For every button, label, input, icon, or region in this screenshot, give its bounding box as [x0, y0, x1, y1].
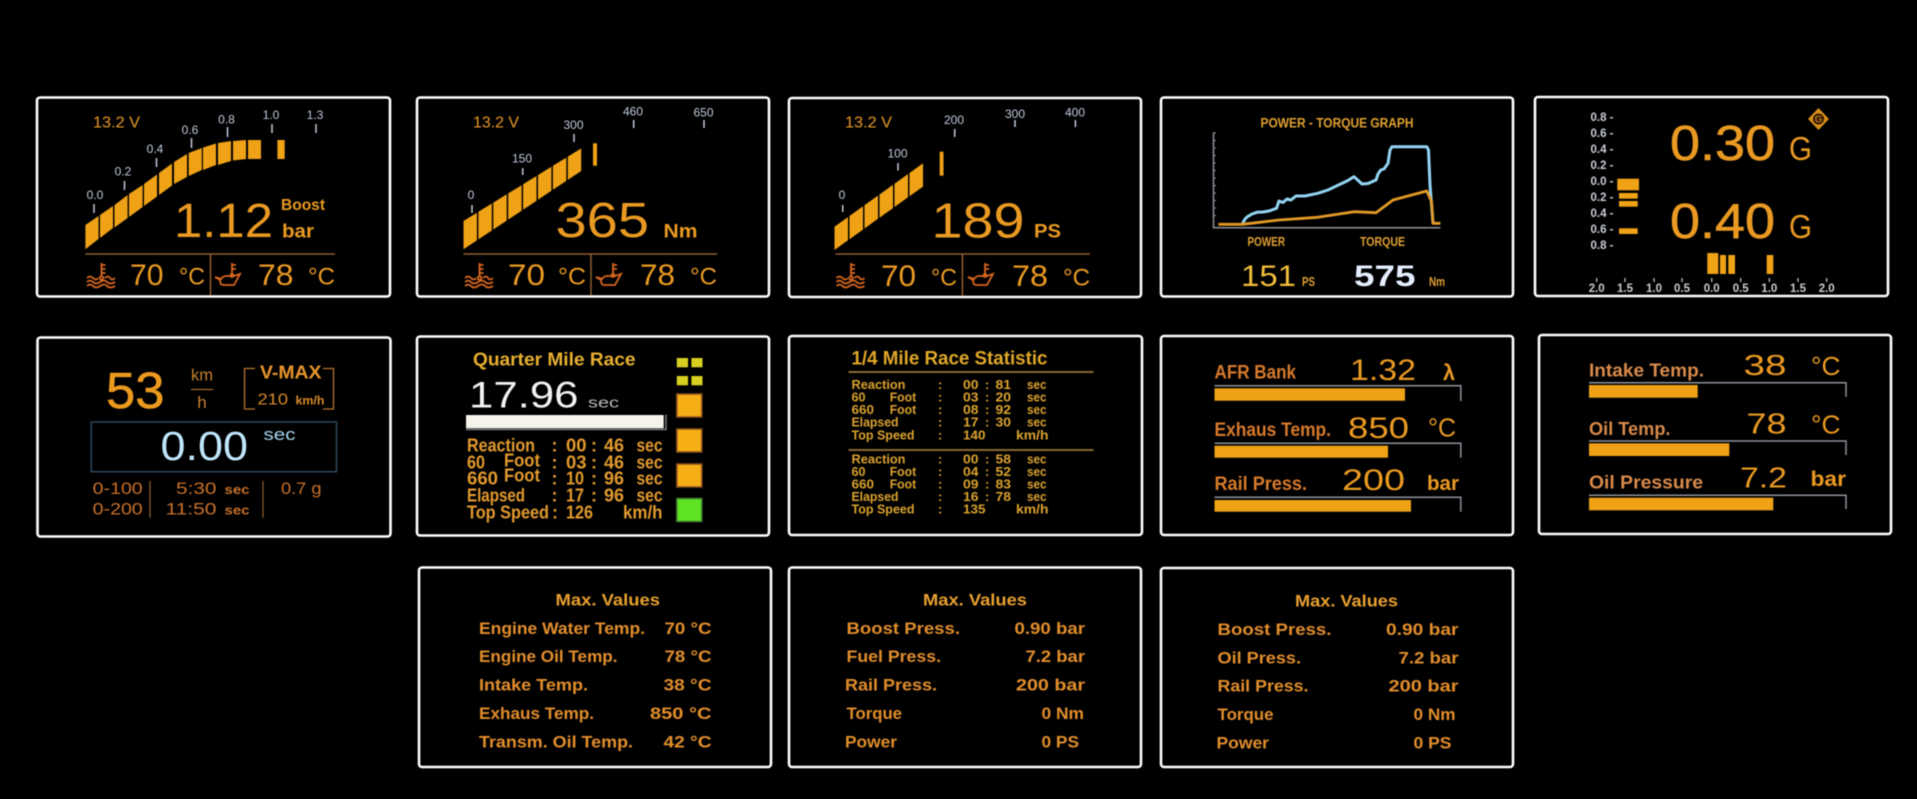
- panel: intake oil: [1539, 335, 1891, 534]
- boost value: 1.12: [174, 195, 273, 248]
- water temperature value: 70: [130, 259, 164, 292]
- longitudinal g value: [1670, 117, 1812, 171]
- values table: Intake Temp.: [479, 676, 588, 694]
- lateral g value: [1670, 195, 1812, 249]
- race results table: sec: [636, 468, 662, 488]
- statistic table 2: 16: [963, 489, 978, 504]
- vertical scale: 0.6 -: [1590, 128, 1614, 140]
- power scale labels: 0: [839, 188, 846, 202]
- torque scale labels: [468, 104, 714, 213]
- values table: 200 bar: [1016, 676, 1085, 694]
- statistic table 1: 20: [996, 390, 1011, 404]
- race results table: sec: [636, 436, 662, 456]
- statistic table 2: 52: [996, 464, 1011, 479]
- race results table: :: [552, 486, 558, 506]
- exhaust row: Exhaus Temp.: [1214, 420, 1331, 441]
- values table: Power: [845, 732, 897, 752]
- values table: [1216, 620, 1459, 752]
- oil temperature row: [1589, 408, 1846, 456]
- v-max box: km/h: [296, 394, 324, 408]
- panel: boost gauge: °C: [308, 264, 335, 290]
- statistic table 1: 140: [963, 428, 986, 442]
- values table: 850 °C: [650, 704, 712, 723]
- longitudinal g value: 0.30: [1670, 117, 1775, 171]
- race results table: sec: [636, 486, 662, 506]
- statistic table 2: :: [985, 476, 989, 492]
- statistic table 2: sec: [1027, 476, 1046, 492]
- boost scale labels: 0.0: [87, 188, 104, 202]
- icon: g badge: [1808, 108, 1829, 130]
- oil pressure row: Oil Pressure: [1589, 472, 1703, 492]
- statistic table 1: km/h: [1016, 428, 1049, 442]
- panel: race statistic: [789, 336, 1142, 535]
- acceleration times: sec: [224, 482, 250, 497]
- statistic table 2: 660: [852, 476, 874, 492]
- torque value: 365: [556, 194, 649, 248]
- speed unit: [191, 366, 213, 412]
- values table: Rail Press.: [1218, 676, 1308, 696]
- statistic table 1: :: [938, 414, 942, 430]
- horizontal scale: 1.0: [1761, 283, 1777, 295]
- race results table: :: [591, 486, 597, 506]
- values table: Engine Water Temp.: [479, 619, 645, 638]
- line chart: [1214, 132, 1440, 228]
- statistic table 2: :: [938, 489, 942, 504]
- icon: g badge: G: [1815, 114, 1823, 126]
- statistic table 1: :: [938, 402, 942, 417]
- exhaust row: [1214, 412, 1461, 458]
- statistic table 1: Elapsed: [852, 414, 899, 430]
- race results table: :: [591, 436, 597, 456]
- acceleration times: [93, 480, 322, 518]
- race results table: Top Speed: [467, 502, 549, 522]
- panel: boost gauge: [37, 98, 390, 296]
- statistic table 1: :: [938, 377, 942, 392]
- race time: [469, 374, 620, 416]
- v-max box: [244, 362, 334, 409]
- panel: power gauge: °C: [1063, 264, 1090, 292]
- icon: water temperature: [836, 263, 864, 288]
- power bar segments: [834, 152, 944, 250]
- vertical scale: 0.2 -: [1590, 192, 1614, 204]
- statistic table 1: 92: [996, 402, 1011, 417]
- vertical scale: 0.4 -: [1590, 144, 1614, 156]
- statistic table 2: :: [938, 464, 942, 479]
- statistic table 2: :: [985, 464, 989, 479]
- statistic title: 1/4 Mile Race Statistic: [852, 348, 1048, 370]
- race results table: 96: [604, 486, 624, 506]
- exhaust row: 850: [1348, 412, 1409, 445]
- values table: 0 PS: [1414, 734, 1452, 752]
- boost bar segments: [85, 140, 285, 249]
- statistic table 2: :: [938, 476, 942, 492]
- values table: 7.2 bar: [1398, 648, 1459, 668]
- horizontal scale: [1589, 278, 1835, 295]
- race results table: :: [591, 452, 597, 472]
- longitudinal g value: G: [1789, 130, 1812, 167]
- statistic table 1: 08: [963, 402, 978, 417]
- horizontal scale: 0.5: [1674, 283, 1691, 295]
- oil pressure row: bar: [1810, 468, 1846, 491]
- horizontal scale: 1.0: [1646, 283, 1662, 295]
- values table: 7.2 bar: [1026, 647, 1085, 666]
- horizontal scale: 0.5: [1733, 283, 1749, 295]
- statistic table 1: 60: [852, 390, 866, 404]
- vertical scale: 0.8 -: [1590, 112, 1614, 124]
- torque scale labels: 460: [623, 104, 643, 118]
- panel: afr exhaust rail: [1161, 336, 1513, 535]
- lateral g value: G: [1789, 208, 1812, 245]
- oil temperature row: 78: [1746, 408, 1786, 440]
- boost scale labels: 0.2: [115, 164, 132, 178]
- elapsed timer box: [91, 422, 336, 472]
- boost scale labels: [87, 108, 324, 213]
- statistic table 2: 04: [963, 464, 979, 479]
- boost scale labels: 1.3: [307, 108, 324, 122]
- rail pressure row: 200: [1342, 464, 1405, 497]
- statistic table 2: :: [985, 452, 989, 466]
- values table: Engine Oil Temp.: [479, 647, 618, 666]
- values table: 42 °C: [664, 732, 712, 752]
- statistic table 2: km/h: [1016, 502, 1049, 516]
- acceleration times: sec: [224, 502, 250, 518]
- torque scale labels: 150: [512, 152, 532, 166]
- power scale labels: 400: [1065, 106, 1085, 120]
- statistic table 2: [852, 452, 1049, 516]
- values table: Torque: [1218, 705, 1274, 724]
- panel: max values pressures fuel: [789, 568, 1141, 767]
- statistic table 2: 78: [996, 489, 1011, 504]
- graph title: POWER - TORQUE GRAPH: [1260, 116, 1414, 130]
- vertical scale: 0.2 -: [1590, 160, 1614, 172]
- intake row: °C: [1811, 351, 1840, 381]
- torque scale labels: 650: [693, 106, 714, 120]
- statistic table 2: :: [938, 452, 942, 466]
- statistic table 2: 60: [852, 464, 866, 479]
- boost scale labels: 0.6: [182, 123, 199, 137]
- values table: 0.90 bar: [1386, 620, 1459, 639]
- legend labels: POWER: [1248, 234, 1285, 249]
- panel: v-max timer: [38, 338, 390, 536]
- statistic table 1: :: [985, 390, 989, 404]
- heading: Max. Values: [556, 590, 660, 610]
- rail pressure row: bar: [1427, 473, 1459, 495]
- panel: max values pressures oil: [1161, 568, 1513, 767]
- statistic table 2: sec: [1027, 464, 1046, 479]
- divider: [464, 254, 717, 295]
- boost scale labels: 0.4: [147, 142, 164, 156]
- acceleration times: 11:50: [166, 500, 216, 518]
- power reading: [1241, 260, 1315, 293]
- torque unit: Nm: [664, 222, 698, 242]
- values table: Rail Press.: [845, 676, 937, 694]
- power value: 189: [932, 194, 1024, 248]
- heading: Max. Values: [1295, 592, 1398, 610]
- elapsed timer box: 0.00: [160, 423, 248, 469]
- race time: 17.96: [469, 374, 578, 416]
- power scale labels: [839, 106, 1085, 212]
- vertical scale: 0.6 -: [1590, 224, 1614, 236]
- v-max box: V-MAX: [260, 362, 322, 382]
- oil temperature value: 78: [640, 259, 675, 292]
- values table: 0.90 bar: [1014, 619, 1085, 638]
- values table: Exhaus Temp.: [479, 704, 594, 723]
- race results table: :: [552, 452, 558, 472]
- acceleration times: 5:30: [176, 480, 216, 498]
- race time: sec: [588, 394, 620, 412]
- race title: Quarter Mile Race: [473, 350, 636, 370]
- progress bar: [466, 414, 666, 430]
- rail pressure row: Rail Press.: [1214, 474, 1307, 495]
- afr row: [1214, 354, 1461, 401]
- values table: Fuel Press.: [846, 647, 941, 666]
- power scale labels: 300: [1005, 107, 1025, 121]
- torque reading: Nm: [1429, 274, 1445, 289]
- statistic table 2: sec: [1027, 452, 1046, 466]
- panel: power torque graph: [1161, 98, 1513, 296]
- values table: Boost Press.: [846, 619, 960, 638]
- voltage: 13.2 V: [93, 114, 140, 132]
- oil pressure row: 7.2: [1740, 462, 1787, 494]
- acceleration times: 0-200: [93, 500, 143, 518]
- power reading: PS: [1302, 274, 1315, 289]
- statistic table 2: :: [938, 502, 942, 516]
- start lights: [677, 358, 702, 522]
- statistic table 1: Foot: [890, 402, 917, 417]
- race results table: :: [552, 502, 558, 522]
- water temperature value: 70: [881, 260, 916, 293]
- race results table: :: [552, 468, 558, 488]
- race results table: [467, 436, 662, 522]
- race results table: 00: [566, 436, 586, 456]
- intake row: Intake Temp.: [1589, 360, 1704, 380]
- values table: 0 Nm: [1414, 705, 1456, 724]
- panel: max values temperatures: [419, 568, 771, 767]
- statistic table 1: sec: [1027, 402, 1046, 417]
- boost unit: bar: [282, 222, 315, 242]
- values table: Oil Press.: [1218, 648, 1301, 668]
- statistic table 1: 17: [963, 414, 978, 430]
- race results table: :: [591, 468, 597, 488]
- statistic table 2: Foot: [890, 464, 917, 479]
- statistic table 2: 58: [996, 452, 1011, 466]
- torque bar segments: [464, 143, 597, 249]
- values table: Boost Press.: [1218, 620, 1332, 639]
- race results table: 96: [604, 468, 624, 488]
- horizontal scale: 1.5: [1790, 283, 1807, 295]
- values table: [479, 619, 712, 752]
- speed unit: km: [191, 366, 213, 384]
- statistic table 1: 660: [852, 402, 874, 417]
- vertical g bars: [1617, 179, 1639, 234]
- torque scale labels: 0: [468, 188, 475, 202]
- panel: torque gauge: °C: [690, 264, 717, 290]
- icon: oil temperature: [215, 263, 240, 285]
- speed value: 53: [106, 362, 164, 419]
- afr row: AFR Bank: [1214, 362, 1296, 384]
- race results table: 10: [566, 468, 584, 488]
- race results table: :: [552, 436, 558, 456]
- horizontal g bars: [1707, 253, 1773, 274]
- panel: torque gauge: °C: [558, 264, 586, 290]
- vertical scale: [1590, 112, 1614, 252]
- statistic table 2: :: [985, 489, 989, 504]
- panel: power gauge: [789, 98, 1141, 297]
- statistic table 1: Reaction: [852, 377, 906, 392]
- statistic table 2: 83: [996, 476, 1011, 492]
- statistic table 1: 81: [996, 377, 1011, 392]
- values table: Transm. Oil Temp.: [479, 732, 633, 752]
- statistic table 2: Elapsed: [852, 489, 899, 504]
- vertical scale: 0.4 -: [1590, 208, 1614, 220]
- lateral g value: 0.40: [1670, 195, 1775, 249]
- oil temperature row: °C: [1811, 410, 1840, 440]
- values table: 0 Nm: [1042, 704, 1084, 723]
- race results table: 60: [467, 452, 485, 472]
- rules: [848, 372, 1094, 450]
- race results table: 126: [566, 502, 593, 522]
- statistic table 1: 03: [963, 390, 978, 404]
- statistic table 1: 00: [963, 377, 978, 392]
- statistic table 1: Top Speed: [852, 428, 915, 442]
- statistic table 2: sec: [1027, 489, 1046, 504]
- race results table: 46: [604, 452, 624, 472]
- race results table: Elapsed: [467, 486, 525, 506]
- values table: 38 °C: [664, 676, 712, 694]
- statistic table 1: :: [985, 402, 989, 417]
- intake row: [1589, 350, 1846, 398]
- oil pressure row: [1589, 462, 1846, 510]
- panel: torque gauge: [417, 98, 769, 296]
- torque reading: [1354, 260, 1445, 293]
- voltage: 13.2 V: [473, 114, 519, 132]
- statistic table 2: Top Speed: [852, 502, 915, 516]
- boost scale labels: 0.8: [218, 112, 235, 126]
- race results table: 17: [566, 486, 584, 506]
- boost unit: [281, 197, 325, 242]
- oil temperature value: 78: [1012, 260, 1048, 293]
- race results table: km/h: [623, 502, 662, 522]
- elapsed timer box: sec: [264, 425, 296, 444]
- vertical scale: 0.0 -: [1590, 176, 1614, 188]
- race results table: 46: [604, 436, 624, 456]
- acceleration times: 0.7 g: [281, 480, 322, 498]
- oil temperature value: 78: [258, 259, 294, 292]
- statistic table 1: :: [985, 377, 989, 392]
- race results table: Foot: [504, 466, 540, 486]
- values table: 78 °C: [664, 647, 712, 666]
- statistic table 1: :: [938, 390, 942, 404]
- divider: [85, 254, 335, 295]
- race results table: Foot: [504, 450, 540, 470]
- torque reading: 575: [1354, 260, 1416, 293]
- icon: oil temperature: [596, 263, 621, 285]
- divider: [835, 254, 1090, 296]
- values table: 70 °C: [664, 619, 712, 638]
- power scale labels: 200: [944, 113, 964, 127]
- horizontal scale: 2.0: [1819, 283, 1835, 295]
- rail pressure row: [1214, 464, 1461, 512]
- afr row: λ: [1443, 360, 1455, 385]
- horizontal scale: 1.5: [1617, 283, 1634, 295]
- statistic table 1: Foot: [890, 390, 917, 404]
- afr row: 1.32: [1350, 354, 1416, 387]
- icon: water temperature: [87, 263, 115, 288]
- values table: 200 bar: [1388, 676, 1459, 696]
- panel: power torque graph: TORQUE: [1360, 234, 1405, 249]
- statistic table 1: :: [985, 414, 989, 430]
- vertical scale: 0.8 -: [1590, 240, 1614, 252]
- boost scale labels: 1.0: [263, 108, 280, 122]
- power reading: 151: [1241, 260, 1296, 293]
- statistic table 1: sec: [1027, 377, 1046, 392]
- acceleration times: 0-100: [93, 480, 143, 498]
- statistic table 1: :: [938, 428, 942, 442]
- race results table: sec: [636, 452, 662, 472]
- boost unit: Boost: [281, 197, 325, 214]
- statistic table 2: Foot: [890, 476, 917, 492]
- values table: [845, 619, 1085, 752]
- statistic table 2: 00: [963, 452, 978, 466]
- statistic table 2: 09: [963, 476, 978, 492]
- panel: boost gauge: °C: [179, 264, 205, 290]
- statistic table 1: 30: [996, 414, 1011, 430]
- horizontal scale: 0.0: [1704, 283, 1720, 295]
- statistic table 2: 135: [963, 502, 986, 516]
- race results table: 660: [467, 468, 498, 488]
- values table: Torque: [846, 704, 902, 723]
- voltage: 13.2 V: [845, 114, 892, 132]
- panel: g force: [1535, 97, 1888, 296]
- torque scale labels: 300: [563, 118, 584, 132]
- exhaust row: °C: [1428, 412, 1456, 442]
- race results table: Reaction: [467, 436, 535, 456]
- water temperature value: 70: [508, 259, 545, 292]
- v-max box: 210: [258, 392, 288, 408]
- heading: Max. Values: [923, 590, 1027, 610]
- icon: water temperature: [465, 263, 493, 288]
- intake row: 38: [1744, 350, 1786, 382]
- icon: oil temperature: [968, 263, 993, 285]
- values table: Power: [1216, 734, 1269, 752]
- horizontal scale: 2.0: [1589, 283, 1605, 295]
- race results table: 03: [566, 452, 586, 472]
- statistic table 1: [852, 377, 1049, 442]
- power unit: PS: [1034, 222, 1061, 242]
- statistic table 2: Reaction: [852, 452, 906, 466]
- statistic table 1: sec: [1027, 414, 1046, 430]
- statistic table 1: sec: [1027, 390, 1046, 404]
- power scale labels: 100: [887, 146, 908, 160]
- panel: quarter mile race: [417, 336, 769, 536]
- panel: power gauge: °C: [931, 264, 957, 292]
- values table: 0 PS: [1042, 732, 1079, 752]
- speed unit: h: [197, 393, 207, 412]
- oil temperature row: Oil Temp.: [1589, 419, 1670, 439]
